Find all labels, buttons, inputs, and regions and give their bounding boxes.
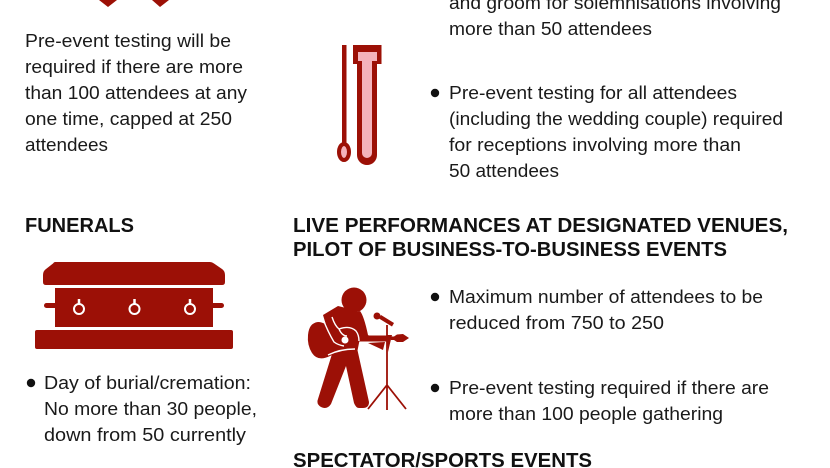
text: live performance rules: Pre-event testing required if there are [449,377,769,398]
text: wedding solemnisation and reception rules: Pre-event testing for all attendees [449,82,737,103]
icon: guitarist with microphone [308,288,409,410]
heading: funerals: FUNERALS [25,215,134,237]
text: funeral rules: down from 50 currently [44,424,247,445]
heading: live performances: LIVE PERFORMANCES AT DESIGNATED VENUES, [293,215,788,237]
icon: guitar sound hole [342,336,348,344]
text: pre-event testing note [25,30,248,155]
icon: top left markers [99,0,169,7]
text: funeral rules [27,372,257,445]
text: pre-event testing note: Pre-event testing will be [25,30,231,51]
heading: live performances [293,215,788,261]
icon: swab and test tube [339,45,382,165]
text: live performance rules: reduced from 750 to 250 [449,312,664,333]
text: wedding solemnisation and reception rules: more than 50 attendees [449,18,652,39]
text: pre-event testing note: one time, capped at 250 [25,108,232,129]
text: wedding solemnisation and reception rules: (including the wedding couple) required [449,108,783,129]
text: live performance rules: more than 100 people gathering [449,403,723,424]
text: pre-event testing note: than 100 attendees at any [25,82,248,103]
heading: live performances: PILOT OF BUSINESS-TO-BUSINESS EVENTS [293,239,727,261]
text: pre-event testing note: attendees [25,134,108,155]
text: live performance rules: Maximum number of attendees to be [449,286,763,307]
icon: coffin [35,262,233,349]
text: wedding solemnisation and reception rules: for receptions involving more than [449,134,741,155]
text: live performance rules [431,286,769,424]
text: wedding solemnisation and reception rules [431,0,783,181]
text: wedding solemnisation and reception rules: 50 attendees [449,160,559,181]
text: funeral rules: No more than 30 people, [44,398,257,419]
text: pre-event testing note: required if there are more [25,56,243,77]
text: funeral rules: Day of burial/cremation: [44,372,251,393]
